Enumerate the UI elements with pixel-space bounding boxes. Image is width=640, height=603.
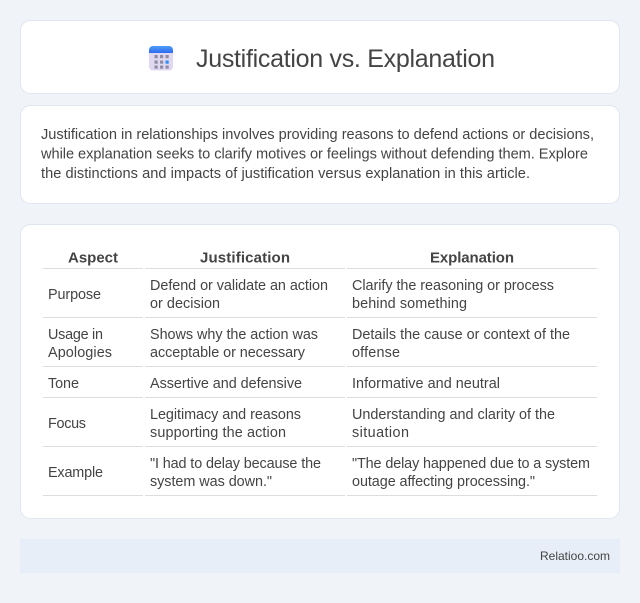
description text (40, 127, 594, 182)
table header: Justification (200, 250, 290, 266)
row: focus: supporting the action (150, 425, 286, 441)
row: usage in apologies: acceptable or necessary (150, 345, 306, 361)
row: purpose: behind something (352, 296, 467, 312)
table header: Explanation (430, 250, 514, 266)
row: purpose: or decision (150, 296, 220, 312)
panel: comparison table (20, 224, 620, 518)
row: tone (48, 376, 500, 392)
footer credit: Relatioo.com (540, 549, 610, 563)
row: focus: situation (352, 425, 409, 441)
table header (68, 250, 514, 266)
panel: description (20, 106, 620, 204)
row: focus: Focus (48, 416, 86, 432)
row: purpose: Defend or validate an action (150, 278, 328, 294)
description text: while explanation seeks to clarify motives or feelings without defending them. Explore (40, 146, 588, 162)
title: Justification vs. Explanation (196, 45, 495, 73)
footer bar (20, 539, 620, 573)
row: usage in apologies: Shows why the action was (150, 327, 318, 343)
row: usage in apologies: Usage in (48, 327, 103, 343)
description text: the distinctions and impacts of justification versus explanation in this article. (41, 166, 530, 182)
panel: title card (20, 20, 620, 94)
row: usage in apologies (48, 327, 570, 361)
row: tone: Assertive and defensive (150, 376, 302, 392)
row: example: outage affecting processing." (352, 474, 535, 490)
table header: Aspect (68, 250, 118, 266)
row: example: "I had to delay because the (150, 456, 321, 472)
row: purpose: Purpose (48, 287, 101, 303)
row: example: "The delay happened due to a system (352, 456, 590, 472)
row: usage in apologies: Details the cause or context of the (352, 327, 570, 343)
icon: calendar (149, 46, 173, 70)
row: purpose: Clarify the reasoning or process (352, 278, 554, 294)
row: tone: Informative and neutral (352, 376, 500, 392)
row: tone: Tone (48, 376, 79, 392)
row: focus: Understanding and clarity of the (352, 407, 555, 423)
row: example: system was down." (150, 474, 272, 490)
row: focus (48, 407, 555, 441)
row: purpose (48, 278, 554, 312)
row: example (48, 456, 590, 490)
row: usage in apologies: offense (352, 345, 400, 361)
description text: Justification in relationships involves providing reasons to defend actions or decisions, (41, 127, 594, 143)
row: usage in apologies: Apologies (48, 345, 112, 361)
row: example: Example (48, 465, 103, 481)
row: focus: Legitimacy and reasons (150, 407, 301, 423)
